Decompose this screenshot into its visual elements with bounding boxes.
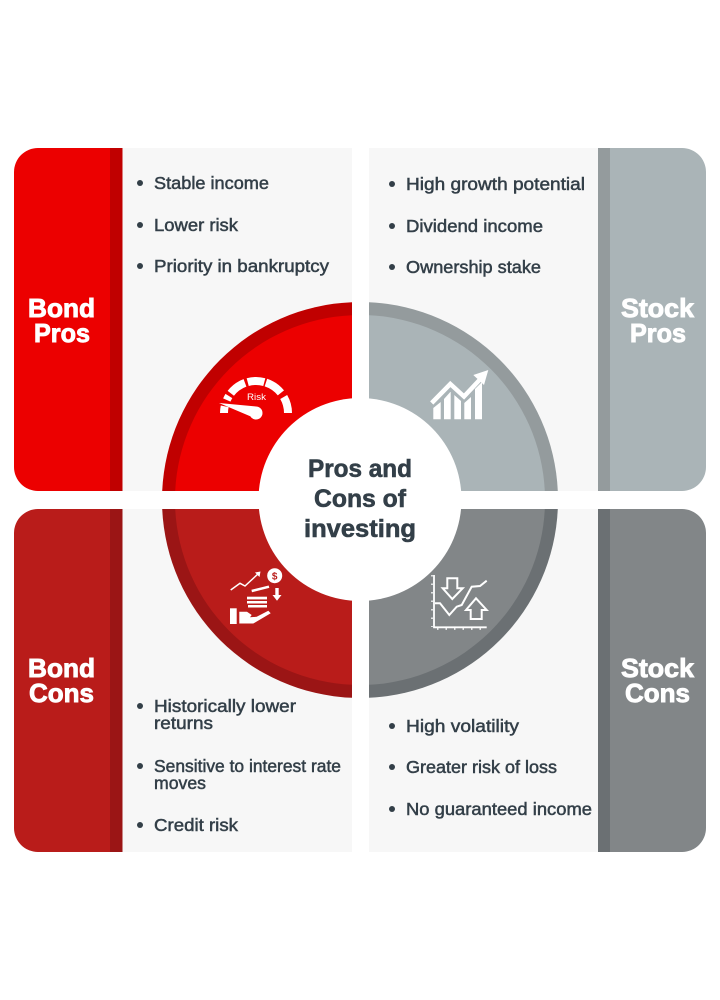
heading block: stock cons: Stock bbox=[621, 653, 695, 683]
panel: bond pros bbox=[14, 148, 352, 491]
list: bond cons: returns bbox=[154, 713, 213, 733]
icon: risk gauge bbox=[219, 381, 288, 420]
title bbox=[304, 455, 416, 543]
list: bond pros: Priority in bankruptcy bbox=[154, 256, 329, 276]
list: stock pros: Dividend income bbox=[406, 216, 543, 236]
heading block: bond pros: Bond bbox=[28, 293, 95, 323]
heading block: stock cons: Cons bbox=[625, 678, 690, 708]
list: bond cons: moves bbox=[154, 773, 206, 793]
heading block: bond cons: Bond bbox=[28, 653, 95, 683]
icon: risk gauge: Risk bbox=[247, 392, 266, 403]
list: bond cons: Sensitive to interest rate bbox=[154, 756, 341, 776]
list: stock pros: Ownership stake bbox=[406, 257, 541, 277]
icon: volatility chart bbox=[432, 575, 487, 629]
list: stock pros: High growth potential bbox=[406, 174, 585, 194]
quadrant: bond cons bbox=[162, 509, 352, 698]
heading block: bond pros bbox=[14, 148, 122, 491]
quadrant: bond pros bbox=[162, 302, 352, 491]
list: bond pros: Stable income bbox=[154, 173, 269, 193]
heading block: bond pros: Pros bbox=[34, 318, 90, 348]
quadrant: stock cons bbox=[369, 509, 558, 698]
panel: bond cons bbox=[14, 509, 352, 852]
list: stock cons bbox=[389, 716, 592, 819]
list: bond pros: Lower risk bbox=[154, 215, 238, 235]
quadrant: stock pros bbox=[369, 302, 558, 491]
panel: stock pros bbox=[369, 148, 706, 491]
icon: hand with coins: $ bbox=[272, 572, 278, 582]
title: Cons of bbox=[314, 485, 407, 513]
center circle bbox=[258, 398, 462, 601]
heading block: stock pros: Pros bbox=[630, 318, 686, 348]
heading block: stock pros: Stock bbox=[621, 293, 695, 323]
list: stock cons: Greater risk of loss bbox=[406, 757, 557, 777]
list: bond cons bbox=[137, 696, 341, 835]
panel: stock cons bbox=[369, 509, 706, 852]
list: stock cons: High volatility bbox=[406, 716, 519, 736]
icon: hand with coins bbox=[230, 568, 282, 624]
heading block: stock pros bbox=[598, 148, 706, 491]
list: bond cons: Credit risk bbox=[154, 815, 238, 835]
list: stock cons: No guaranteed income bbox=[406, 799, 592, 819]
title: Pros and bbox=[308, 455, 412, 483]
icon: growth chart bbox=[432, 370, 488, 419]
title: investing bbox=[304, 515, 416, 543]
heading block: bond cons bbox=[14, 509, 122, 852]
heading block: bond cons: Cons bbox=[29, 678, 94, 708]
heading block: stock cons bbox=[598, 509, 706, 852]
list: stock pros bbox=[389, 174, 585, 277]
list: bond pros bbox=[137, 173, 329, 276]
list: bond cons: Historically lower bbox=[154, 696, 296, 716]
